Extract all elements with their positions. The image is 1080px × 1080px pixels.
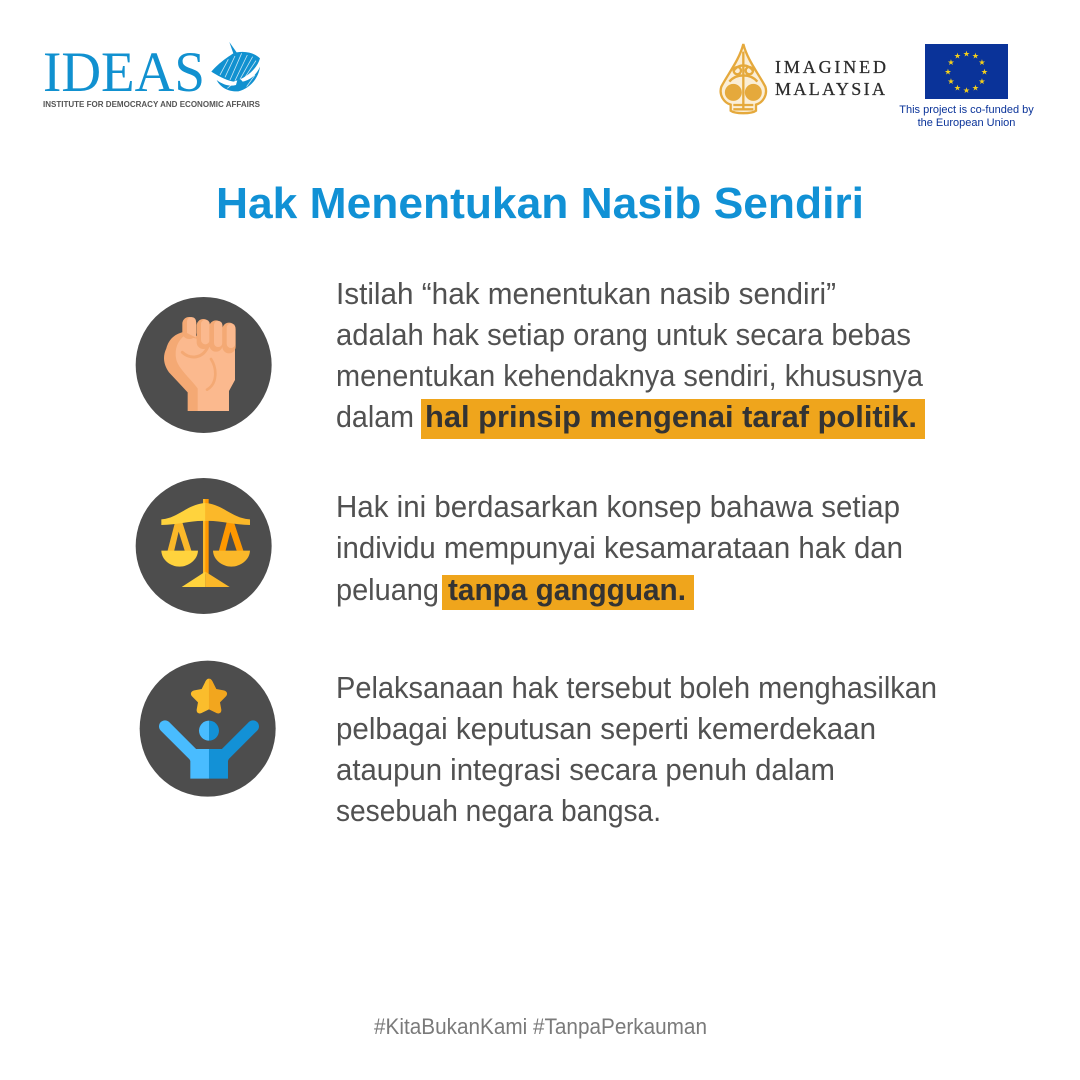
star right half: [209, 679, 227, 713]
flag stars: ★: [981, 68, 988, 76]
palm crease: [207, 359, 215, 390]
text block: outcomes: pelbagai keputusan seperti kemerdekaan: [336, 711, 876, 746]
finger: little: [222, 323, 236, 353]
highlight: without interference: tanpa gangguan.: [448, 572, 686, 607]
left pan: [161, 551, 198, 567]
left pan straps: [167, 522, 192, 552]
left arm and body: [165, 726, 199, 760]
fist shadow side: [164, 332, 228, 411]
text block: definition: adalah hak setiap orang untuk secara bebas: [336, 317, 911, 352]
logo: European Union flag: [899, 44, 1034, 129]
circle background: [136, 478, 272, 614]
logo: European Union flag: the European Union: [918, 117, 1015, 129]
head right half: [209, 721, 219, 741]
circle background: [140, 661, 276, 797]
footer hashtags: #KitaBukanKami #TanpaPerkauman: [374, 1014, 707, 1039]
flag stars: ★: [978, 58, 986, 67]
icon: balance scales: [136, 478, 272, 614]
right arm and body: [219, 726, 253, 760]
text block: definition: Istilah “hak menentukan nasib sendiri”: [336, 276, 836, 311]
text block: definition: menentukan kehendaknya sendiri, khususnya: [336, 358, 924, 393]
base left: [182, 572, 205, 587]
flag stars: ★: [947, 58, 955, 67]
highlight: political status: hal prinsip mengenai taraf politik.: [425, 399, 917, 434]
head left half: [199, 721, 209, 741]
logo: IDEAS: [43, 41, 260, 109]
thumb crease: [182, 346, 208, 357]
flag: [925, 44, 1008, 99]
icon: raised fist: [136, 297, 272, 433]
flag stars: ★: [944, 68, 952, 76]
Imagined Malaysia wordmark: IMAGINED: [775, 57, 886, 77]
wayang emblem: [721, 44, 766, 113]
text block: definition: dalam: [336, 399, 414, 434]
logo: Imagined Malaysia: [721, 44, 886, 113]
text block: definition: [336, 276, 925, 439]
icon: person with star: [140, 661, 276, 797]
flag stars: ★: [963, 50, 970, 58]
flag stars: ★: [947, 77, 955, 86]
flag stars: ★: [972, 52, 979, 60]
text block: outcomes: ataupun integrasi secara penuh dalam: [336, 752, 835, 787]
beam left: [161, 503, 205, 525]
palm: [176, 336, 235, 411]
co-funding note: This project is co-funded by: [899, 104, 1034, 116]
flag stars: ★: [978, 77, 986, 86]
right pan straps: [219, 522, 244, 552]
finger: ring: [209, 320, 223, 352]
title: Hak Menentukan Nasib Sendiri: [216, 179, 864, 228]
centre pole: [203, 499, 206, 574]
flag stars: [944, 50, 988, 95]
flag stars: ★: [954, 52, 961, 60]
finger: index: [182, 317, 196, 339]
text block: basis of the right: individu mempunyai kesamarataan hak dan: [336, 530, 903, 565]
beam right: [205, 503, 250, 525]
text block: outcomes: Pelaksanaan hak tersebut boleh menghasilkan: [336, 670, 937, 705]
finger: middle: [197, 319, 210, 349]
base right: [205, 572, 230, 587]
IDEAS wordmark: IDEAS: [43, 41, 205, 104]
right pan: [213, 551, 250, 567]
star left half: [191, 679, 209, 713]
logo: Imagined Malaysia: MALAYSIA: [775, 79, 885, 99]
text block: basis of the right: [336, 489, 903, 610]
text block: outcomes: [336, 670, 937, 828]
flag stars: ★: [954, 84, 961, 92]
text block: outcomes: sesebuah negara bangsa.: [336, 793, 661, 828]
flag stars: ★: [972, 84, 979, 92]
text block: basis of the right: Hak ini berdasarkan konsep bahawa setiap: [336, 489, 900, 524]
circle background: [136, 297, 272, 433]
text block: basis of the right: peluang: [336, 572, 439, 607]
IDEAS bird emblem: [211, 42, 260, 91]
IDEAS full name: INSTITUTE FOR DEMOCRACY AND ECONOMIC AFFAIRS: [43, 100, 260, 109]
flag stars: ★: [963, 86, 970, 95]
